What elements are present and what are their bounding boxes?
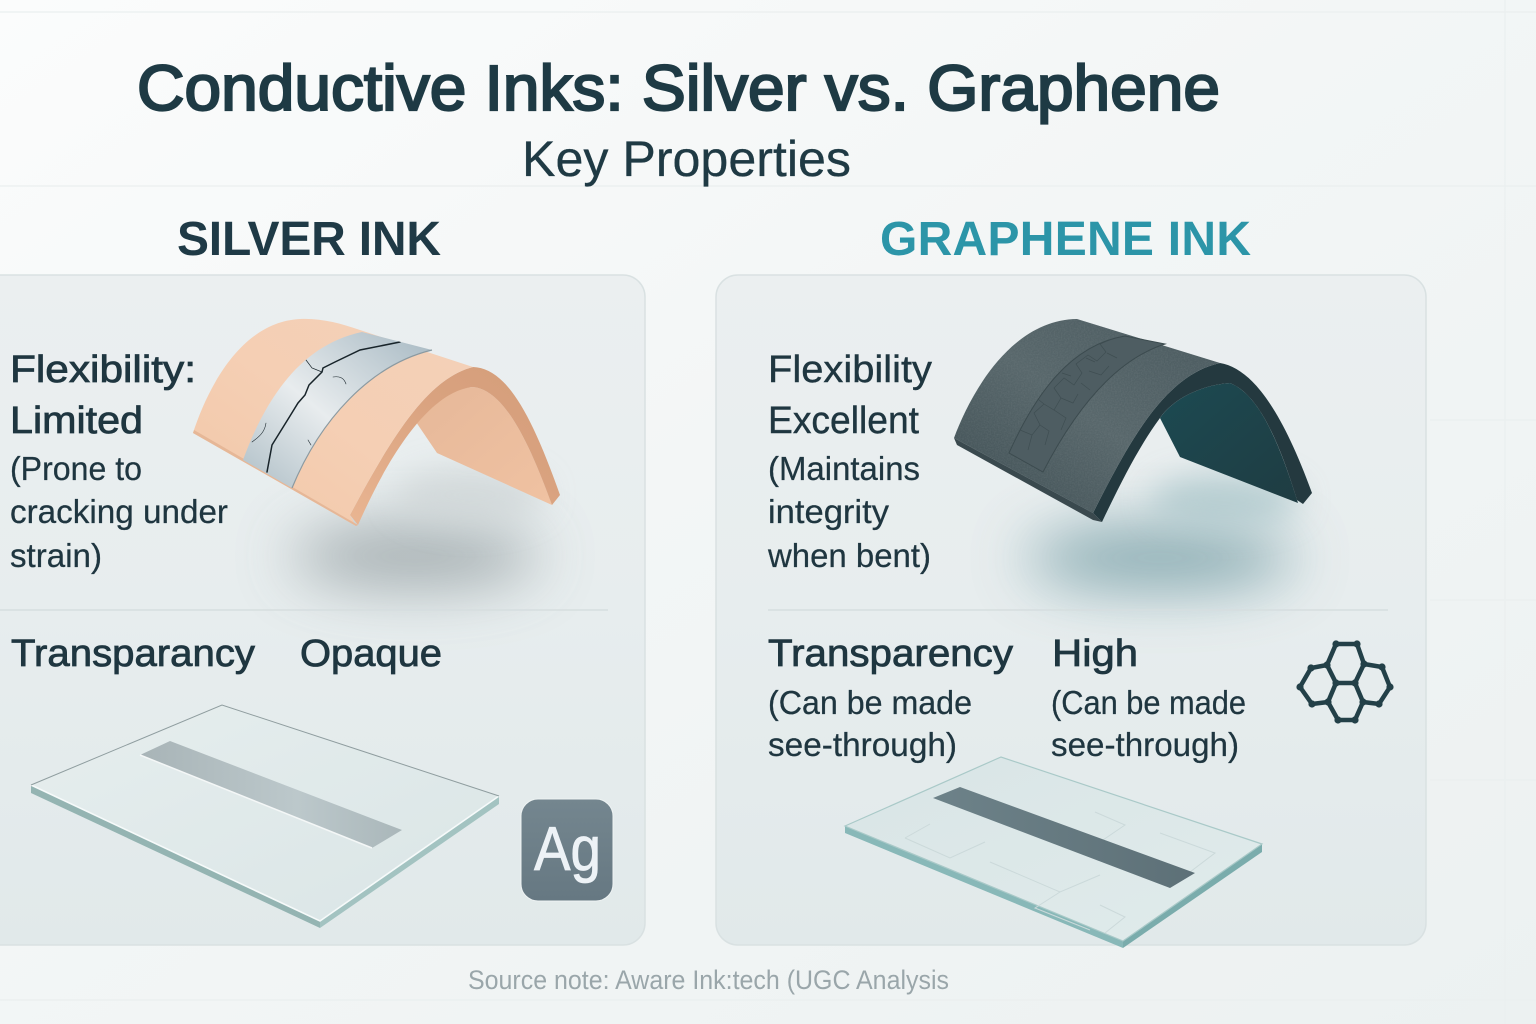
flexibility text: graphene: (Maintains (768, 450, 920, 487)
transparency value: high: High (1052, 633, 1138, 675)
flexibility text: graphene: Flexibility (768, 349, 932, 391)
transparency value: high (1051, 633, 1246, 763)
icon: silver flex strip with cracks (193, 319, 560, 586)
flexibility text: silver: (Prone to (10, 450, 142, 487)
flexibility text: silver (10, 349, 228, 574)
source note: Source note: Aware Ink:tech (UGC Analysis (468, 965, 949, 995)
transparency value: high: (Can be made (1051, 684, 1246, 721)
icon: graphene hexagon lattice (1296, 640, 1394, 724)
icon: Ag element badge (521, 799, 613, 901)
icon: glass slide with silver strip (31, 705, 499, 928)
flexibility text: silver: cracking under (10, 493, 228, 530)
heading: silver ink: SILVER INK (177, 213, 441, 266)
flexibility text: silver: Limited (10, 400, 143, 442)
flexibility text: graphene: Excellent (768, 400, 919, 442)
icon: Ag element badge: Ag (534, 815, 601, 884)
icon: graphene flex strip (954, 319, 1312, 588)
transparency text: graphene: (Can be made (768, 684, 972, 721)
transparency text: graphene: see-through) (768, 726, 957, 763)
transparency text: graphene (768, 633, 1013, 763)
subtitle: Key Properties (522, 131, 851, 187)
transparency value: opaque: Opaque (300, 633, 442, 675)
heading: graphene ink: GRAPHENE INK (880, 213, 1251, 266)
transparency label: silver: Transparancy (11, 633, 255, 675)
title: Conductive Inks: Silver vs. Graphene (137, 52, 1220, 124)
flexibility text: graphene: integrity (768, 493, 890, 530)
flexibility text: graphene (767, 349, 932, 574)
transparency value: high: see-through) (1051, 726, 1239, 763)
transparency text: graphene: Transparency (768, 633, 1013, 675)
panel: graphene ink (716, 275, 1426, 948)
flexibility text: graphene: when bent) (767, 537, 931, 574)
icon: glass slide with graphene strip (845, 757, 1262, 948)
panel: silver ink (0, 275, 645, 945)
flexibility text: silver: strain) (10, 537, 102, 574)
flexibility text: silver: Flexibility: (10, 349, 196, 391)
